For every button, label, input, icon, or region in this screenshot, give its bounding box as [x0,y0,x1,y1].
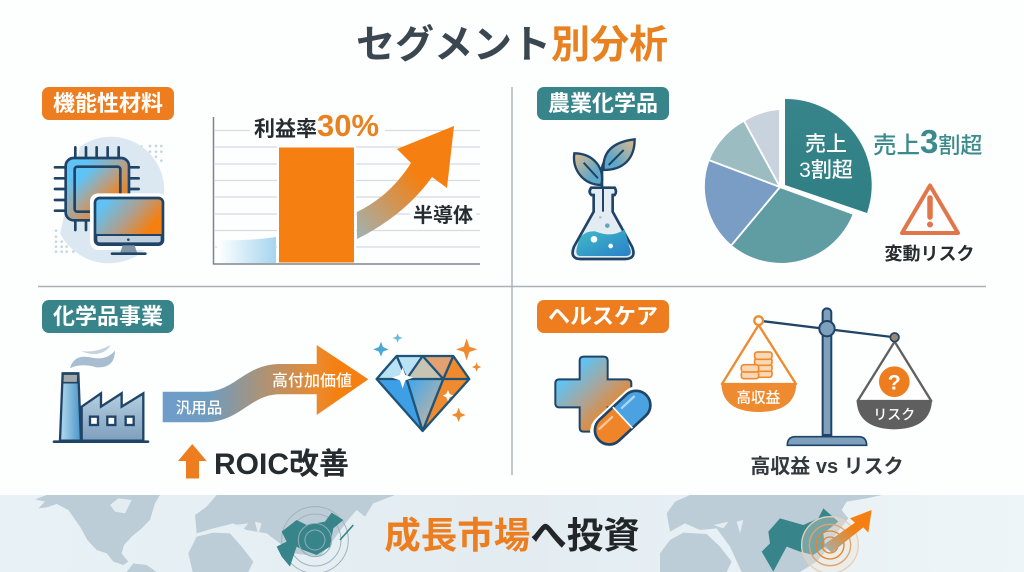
icon: balance scale [721,308,932,445]
highlighted slice: 売上 [805,133,847,156]
icon: up arrow [178,444,207,478]
panel: 農業化学品 [537,87,982,264]
arrow: 汎用品 to 高付加価値: 汎用品 [176,399,222,417]
world map left [35,495,395,572]
icon: warning triangle [902,186,958,233]
callout: 売上3割超: 売上3割超 [873,123,982,160]
icon: flask with sprout [573,139,635,259]
right pan: リスク: リスク [873,406,915,422]
chart label: 利益率30%: 利益率30% [254,108,379,143]
bar chart: 利益率30% [214,108,480,264]
panel: ヘルスケア [537,300,932,478]
icon: chip and monitor [55,137,167,263]
badge: 農業化学品: 農業化学品 [548,91,658,116]
icon: factory [54,345,148,442]
label: ROIC改善 with up arrow: ROIC改善 [214,448,349,481]
panel: 化学品事業 [42,300,481,481]
icon: diamond with sparkles [373,333,481,431]
growth arrow [357,126,454,239]
badge: 農業化学品 [537,87,669,120]
right pan: リスク [857,333,932,429]
badge: ヘルスケア [537,300,669,333]
banner heading: 成長市場へ投資 [384,515,640,556]
panel: 成長市場へ投資 banner [0,495,1024,572]
badge: ヘルスケア: ヘルスケア [548,304,658,329]
left pan: 高収益 [721,316,796,412]
badge: 化学品事業: 化学品事業 [53,304,163,329]
title: セグメント別分析 [356,24,668,67]
panel: 機能性材料 [42,87,480,264]
world map right [660,495,882,572]
label: 変動リスク: 変動リスク [884,244,974,264]
arrow: 汎用品 to 高付加価値: 高付加価値 [272,372,352,390]
panel dividers [38,87,986,475]
badge: 機能性材料 [42,87,174,120]
banner background [0,495,1024,572]
icon: medical cross and capsule [555,357,662,456]
badge: 化学品事業 [42,300,174,333]
highlighted slice: 3割超 [799,159,853,182]
badge: 機能性材料: 機能性材料 [53,91,163,116]
left pan: 高収益: 高収益 [736,390,781,407]
growth arrow [823,510,872,553]
pie chart [704,99,872,264]
right pan: リスク: ? [888,370,901,394]
highlighted slice [785,99,872,213]
arrow: 汎用品 to 高付加価値 [163,345,368,422]
label: 高収益 vs リスク: 高収益 vs リスク [750,455,904,478]
label: 半導体: 半導体 [413,203,473,227]
